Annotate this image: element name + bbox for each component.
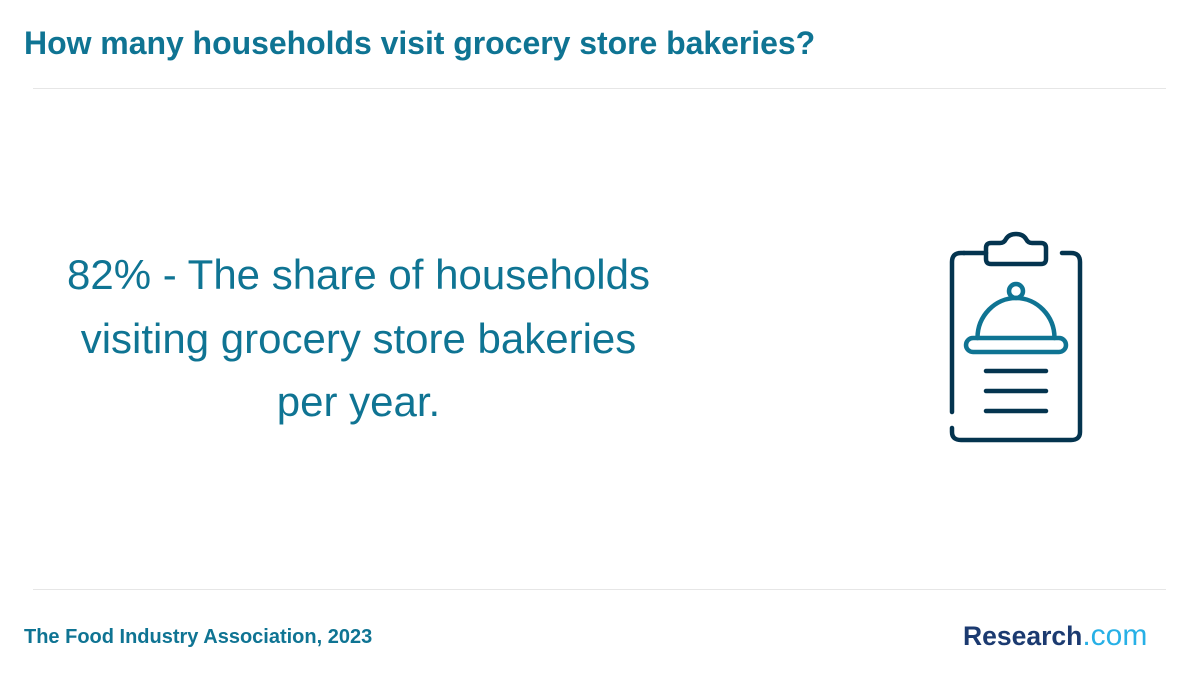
main statistic text: visiting grocery store bakeries xyxy=(81,314,636,362)
clipboard outline xyxy=(952,234,1080,440)
logo: Research.com: Research.com xyxy=(963,619,1147,652)
food cloche xyxy=(966,284,1066,352)
icon: clipboard with food cloche xyxy=(950,232,1082,442)
title: How many households visit grocery store bakeries? xyxy=(24,25,815,61)
main statistic text: 82% - The share of households xyxy=(67,251,650,298)
source note: The Food Industry Association, 2023 xyxy=(24,626,372,648)
main statistic text: per year. xyxy=(277,378,440,425)
main statistic text xyxy=(67,251,650,425)
